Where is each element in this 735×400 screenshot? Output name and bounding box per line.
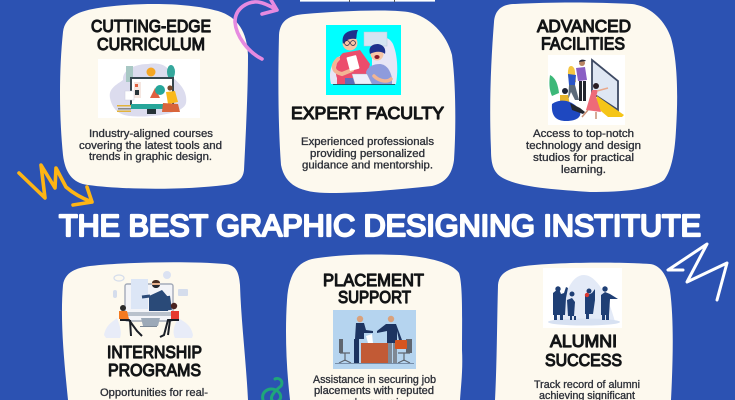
body text: placements with reputed (314, 385, 434, 397)
heading: alumni success: ALUMNI (550, 331, 617, 351)
body text: technology and design (526, 140, 641, 152)
illustration: handshake (333, 310, 416, 369)
body text (534, 379, 640, 400)
illustration: two faculty members (326, 25, 401, 95)
title: THE BEST GRAPHIC DESIGNING INSTITUTE (59, 209, 701, 243)
illustration: mentor with interns (104, 271, 193, 338)
arrow: pink (235, 0, 277, 59)
heading: placement support: SUPPORT (338, 287, 411, 307)
body text (526, 128, 641, 176)
body text: covering the latest tools and (79, 140, 222, 152)
heading: internship programs (107, 342, 202, 380)
squiggle: green (263, 378, 282, 400)
body text: trends in graphic design. (89, 151, 212, 163)
heading: advanced facilities: ADVANCED (537, 16, 631, 36)
body text (301, 136, 434, 172)
heading: placement support (323, 270, 424, 307)
body text: Opportunities for real- (100, 387, 208, 399)
arrow: white (668, 244, 727, 300)
panel: placement support (286, 254, 462, 400)
body text: Access to top-notch (533, 128, 634, 140)
top white strip (300, 0, 435, 2)
body text: Experienced professionals (301, 136, 434, 148)
heading: cutting-edge curriculum: CUTTING-EDGE (91, 16, 211, 36)
heading: placement support: PLACEMENT (323, 270, 424, 290)
body text (79, 128, 222, 163)
body text: learning. (561, 164, 606, 176)
heading: cutting-edge curriculum (91, 16, 211, 54)
body text: providing personalized (310, 148, 425, 160)
heading: alumni success (545, 331, 622, 370)
illustration: team at whiteboard (548, 55, 625, 125)
body text: Assistance in securing job (313, 374, 436, 386)
heading: advanced facilities (537, 16, 631, 54)
body text: Industry-aligned courses (89, 128, 213, 140)
heading: internship programs: INTERNSHIP (107, 342, 202, 362)
panel: internship programs (62, 262, 248, 400)
illustration: graduates (543, 268, 622, 328)
body text: studios for practical (533, 152, 634, 164)
panel: advanced facilities (490, 2, 677, 192)
arrow: yellow (19, 165, 92, 205)
panel: expert faculty (278, 11, 455, 193)
heading: advanced facilities: FACILITIES (541, 34, 625, 54)
heading: alumni success: SUCCESS (545, 350, 622, 370)
body text: Track record of alumni (534, 379, 640, 391)
body text: guidance and mentorship. (302, 160, 433, 172)
illustration: designer at monitor (98, 59, 200, 118)
panel: alumni success (495, 263, 673, 400)
panel: cutting-edge curriculum (60, 4, 248, 189)
heading: expert faculty: EXPERT FACULTY (291, 103, 444, 123)
heading: internship programs: PROGRAMS (108, 360, 201, 380)
heading: cutting-edge curriculum: CURRICULUM (97, 34, 205, 54)
body text (313, 374, 436, 400)
